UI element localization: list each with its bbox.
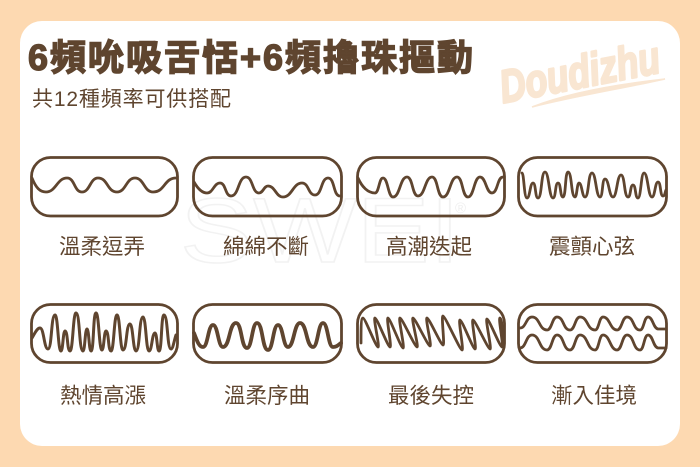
pattern: 最後失控: 最後失控 xyxy=(388,384,474,408)
title: 6頻吮吸舌恬+6頻擼珠摳動 xyxy=(28,37,473,78)
pattern: 最後失控 xyxy=(358,304,504,408)
pattern: 高潮迭起 xyxy=(358,158,504,259)
pattern: 漸入佳境 xyxy=(518,304,666,408)
pattern: 溫柔逗弄 xyxy=(32,158,178,259)
pattern: 溫柔逗弄: 溫柔逗弄 xyxy=(59,235,145,259)
pattern: 熱情高漲: 熱情高漲 xyxy=(60,384,146,408)
watermark: SWEI xyxy=(180,180,460,282)
pattern: 震顫心弦: 震顫心弦 xyxy=(549,235,635,259)
pattern: 綿綿不斷 xyxy=(194,158,342,259)
pattern: 溫柔序曲 xyxy=(194,304,342,408)
watermark: ® xyxy=(455,200,466,217)
pattern: 高潮迭起: 高潮迭起 xyxy=(386,235,472,259)
pattern: 溫柔序曲: 溫柔序曲 xyxy=(224,384,310,408)
pattern: 熱情高漲 xyxy=(32,304,178,408)
pattern: 震顫心弦 xyxy=(518,158,666,259)
pattern: 漸入佳境: 漸入佳境 xyxy=(551,384,637,408)
pattern: 綿綿不斷: 綿綿不斷 xyxy=(223,235,309,259)
subtitle: 共12種頻率可供搭配 xyxy=(32,88,231,111)
